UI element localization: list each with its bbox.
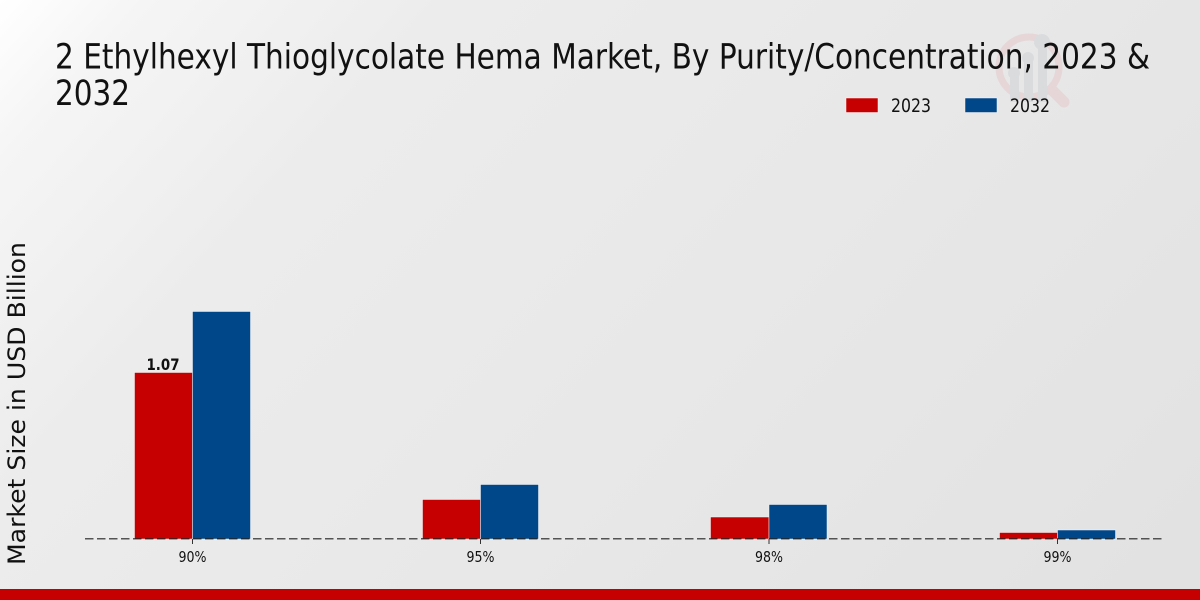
x axis category labels: 99% (1044, 548, 1072, 566)
legend item: 2023 (846, 95, 931, 117)
bars: 99% (1000, 530, 1116, 539)
x axis category labels: 90% (178, 548, 206, 566)
y axis label: Market Size in USD Billion (3, 242, 31, 565)
x axis category labels (178, 548, 1072, 566)
bar chart (85, 312, 1164, 566)
tick marks (192, 539, 1058, 544)
x axis category labels: 98% (755, 548, 783, 566)
bars: 90% (134, 312, 250, 539)
legend item: 2032 (965, 95, 1050, 117)
legend item: 2023: 2023 (891, 95, 931, 117)
legend item: 2032: 2032 (1010, 95, 1050, 117)
value label: 1.07 (146, 355, 180, 374)
x axis category labels: 95% (466, 548, 494, 566)
title: 2032 (55, 74, 130, 114)
footer bar (0, 589, 1200, 600)
bars: 98% (710, 504, 827, 539)
x axis baseline (85, 538, 1164, 540)
bars: 95% (422, 484, 538, 539)
legend (846, 95, 1050, 117)
icon: watermark logo (999, 34, 1064, 102)
